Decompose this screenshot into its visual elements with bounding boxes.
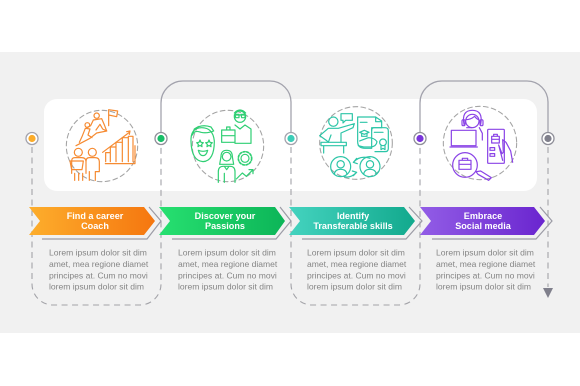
text block: step 2: Lorem ipsum dolor sit dim [178, 248, 276, 258]
text block: step 1: principes at. Cum no movi [49, 270, 148, 280]
icon: social media [443, 106, 517, 180]
chevron outline: step 3 [302, 207, 422, 239]
chevron: step 2 [159, 207, 285, 235]
panel: white icon card [44, 99, 537, 191]
chevron outline: step 1 [42, 207, 161, 239]
chevron: step 3 [289, 207, 415, 235]
chevron outline: step 4 [432, 207, 552, 239]
panel: grey background band [0, 52, 580, 333]
chevron: step 1 [29, 207, 155, 235]
heading: step 2: Discover your [195, 211, 256, 221]
arrow: down arrowhead [543, 288, 553, 298]
text block: step 2: lorem ipsum dolor sit dim [178, 282, 273, 292]
node: grey [542, 132, 554, 144]
text block: step 3: Lorem ipsum dolor sit dim [307, 248, 405, 258]
text block: step 1: Lorem ipsum dolor sit dim [49, 248, 147, 258]
text block: step 2: amet, mea regione diamet [178, 259, 278, 269]
heading: step 4: Embrace [464, 211, 502, 221]
icon: discover passions [191, 110, 264, 182]
icon: transferable skills [320, 107, 392, 179]
connector: solid loops over the top [161, 81, 548, 138]
heading: step 4: Social media [455, 221, 512, 231]
icon: career coach [66, 110, 138, 182]
chevron: step 4 [420, 207, 545, 235]
text block: step 4: principes at. Cum no movi [436, 270, 535, 280]
text block: step 3: lorem ipsum dolor sit dim [307, 282, 402, 292]
heading: step 3: Transferable skills [313, 221, 393, 231]
text block: step 4: Lorem ipsum dolor sit dim [436, 248, 534, 258]
text block: step 1: amet, mea regione diamet [49, 259, 149, 269]
text block: step 4: lorem ipsum dolor sit dim [436, 282, 531, 292]
heading: step 2: Passions [205, 221, 245, 231]
chevron outline: step 2 [172, 207, 291, 239]
text block: step 2: principes at. Cum no movi [178, 270, 277, 280]
heading: step 1: Coach [81, 221, 109, 231]
connector: dashed paths below the nodes [32, 147, 548, 305]
node: teal [285, 132, 297, 144]
text block: step 4: amet, mea regione diamet [436, 259, 536, 269]
node: orange [26, 132, 38, 144]
node: purple [414, 132, 426, 144]
heading: step 1: Find a career [67, 211, 124, 221]
node: green [155, 132, 167, 144]
text block: step 3: amet, mea regione diamet [307, 259, 407, 269]
text block: step 1: lorem ipsum dolor sit dim [49, 282, 144, 292]
text block: step 3: principes at. Cum no movi [307, 270, 406, 280]
heading: step 3: Identify [337, 211, 370, 221]
